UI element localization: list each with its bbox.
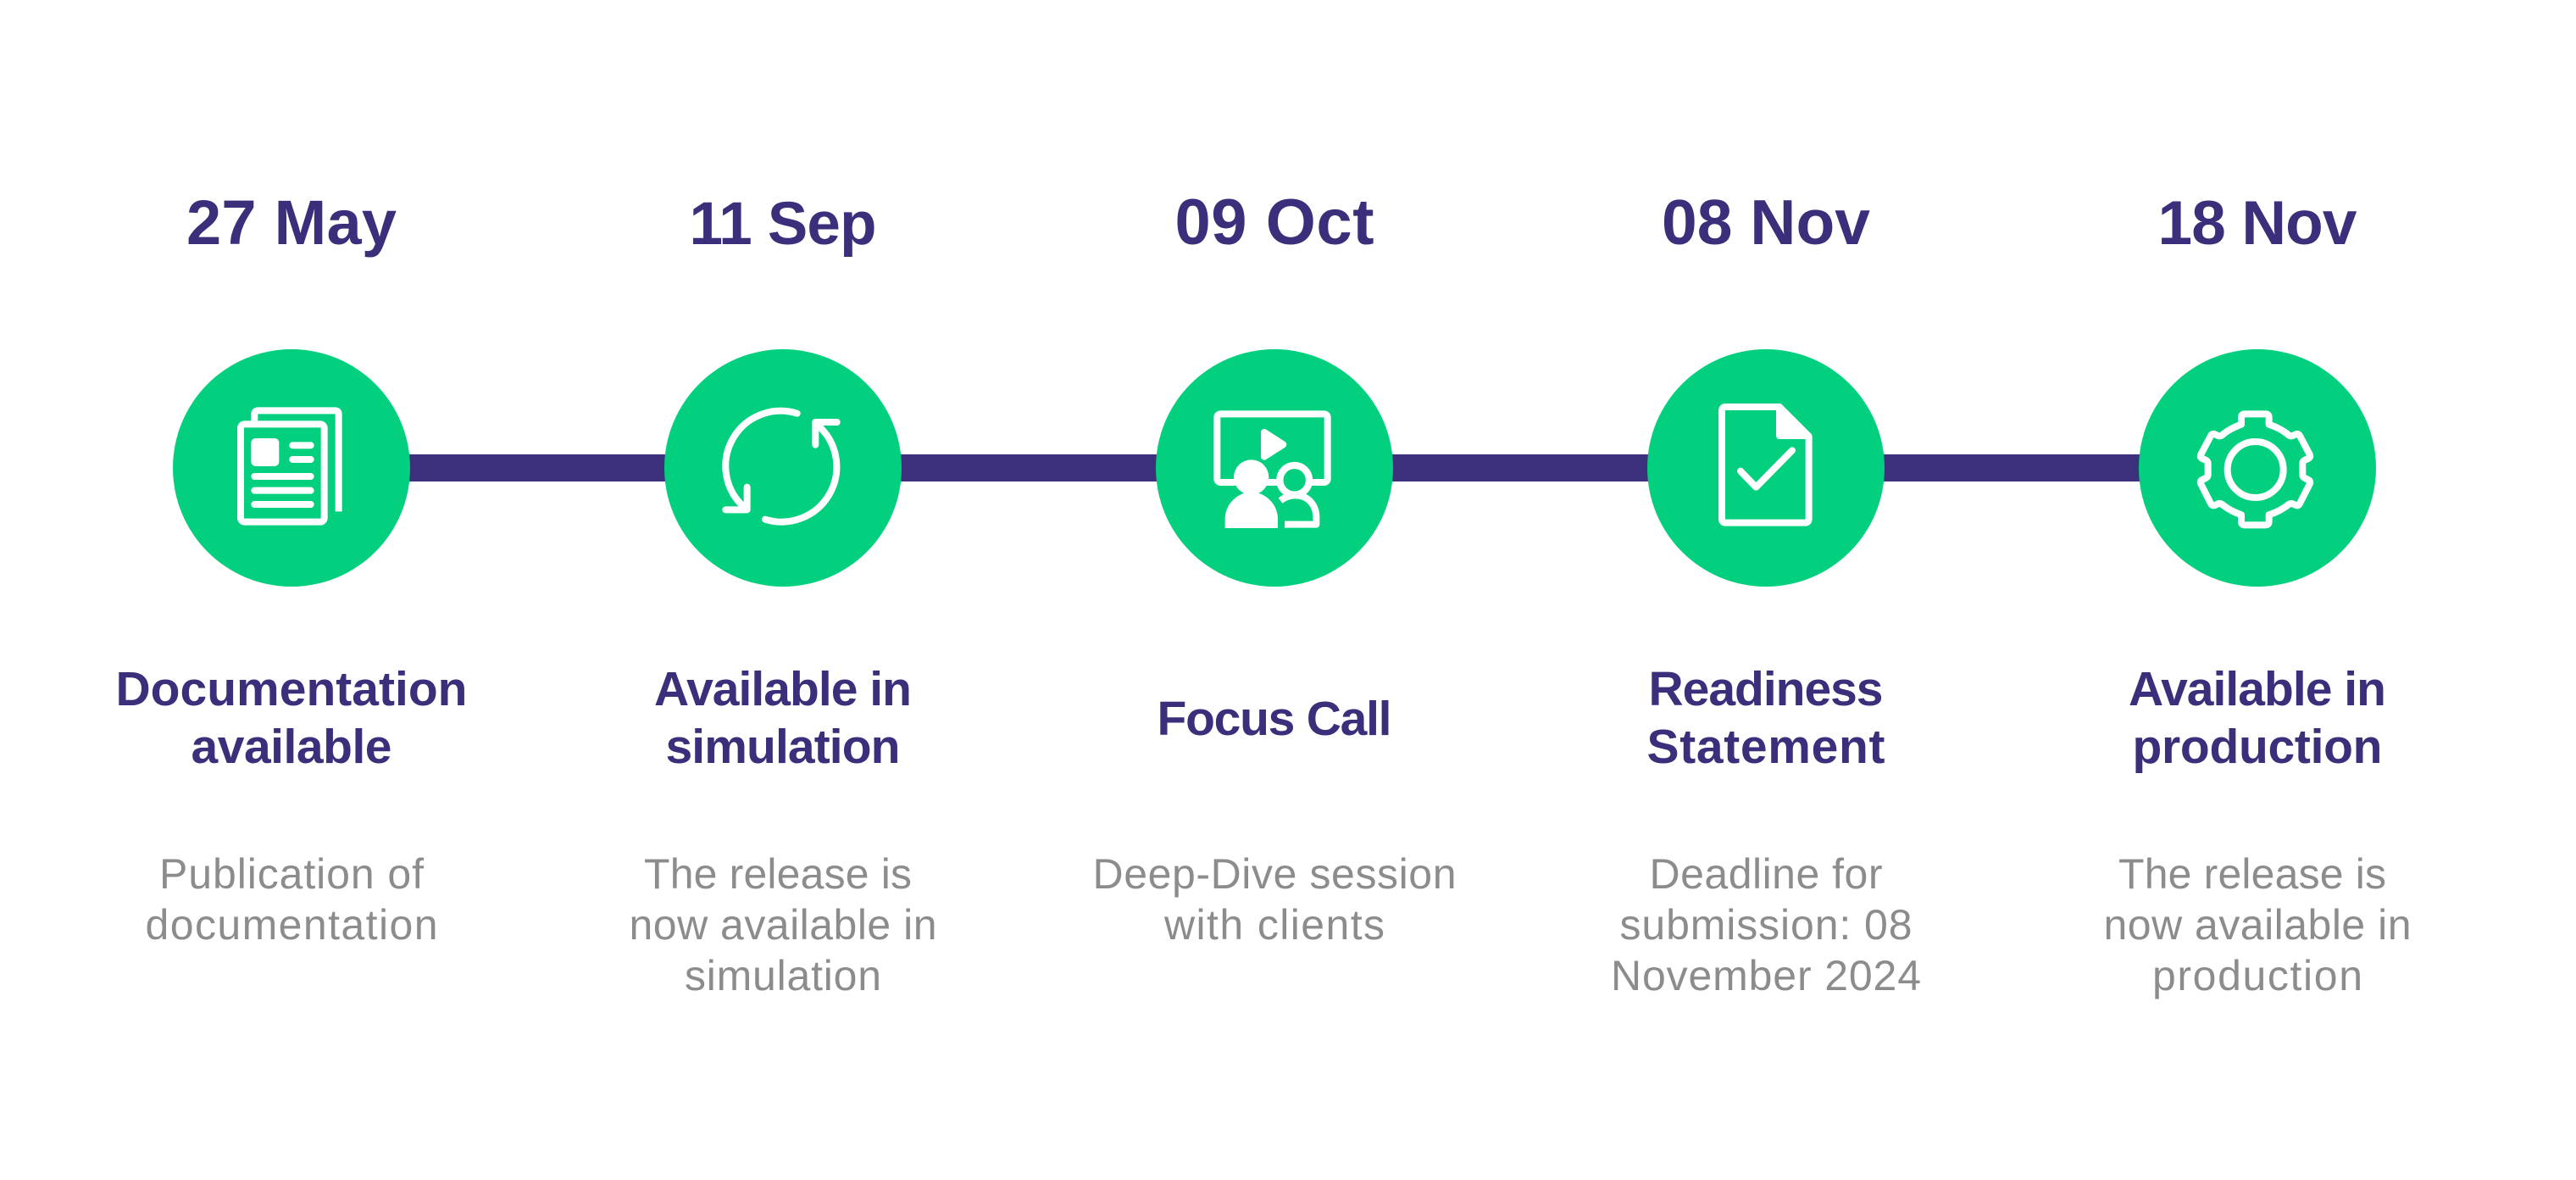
- title: Available in production: Available in: [2129, 662, 2386, 716]
- timeline bar: [291, 454, 2257, 481]
- description: The release is now available in production: The release is: [2118, 850, 2386, 898]
- description: The release is now available in simulation: The release is: [644, 850, 912, 898]
- milestone 5: 18 Nov: [2103, 189, 2412, 999]
- title: Available in simulation: simulation: [666, 720, 900, 774]
- title: Documentation available: [115, 662, 468, 774]
- title: Documentation available: Documentation: [115, 662, 468, 716]
- description: Deadline for submission: 08 November 2024: [1611, 850, 1921, 999]
- date: 09 Oct: 09 Oct: [1174, 186, 1374, 259]
- milestone 4: 08 Nov: [1611, 186, 1921, 999]
- date: 18 Nov: 18 Nov: [2157, 189, 2357, 258]
- description: The release is now available in production: [2103, 850, 2412, 999]
- title: Readiness Statement: [1647, 662, 1885, 774]
- description: Publication of documentation: Publication of: [159, 850, 424, 898]
- description: The release is now available in simulation: simulation: [685, 952, 881, 999]
- description: Publication of documentation: documentation: [146, 901, 437, 949]
- description: The release is now available in simulation: [629, 850, 937, 999]
- icon: documents in green circle: [173, 349, 410, 587]
- description: The release is now available in production: production: [2152, 952, 2362, 999]
- title: Readiness Statement: Statement: [1647, 720, 1885, 774]
- title: Focus Call: Focus Call: [1158, 692, 1391, 746]
- date: 08 Nov: 08 Nov: [1662, 186, 1870, 258]
- date: 27 May: 27 May: [186, 187, 397, 258]
- description: Deadline for submission: 08 November 2024: November 2024: [1611, 952, 1921, 999]
- description: The release is now available in simulation: now available in: [629, 901, 937, 949]
- icon: gear in green circle: [2139, 349, 2376, 587]
- date: 11 Sep: 11 Sep: [690, 191, 876, 258]
- description: The release is now available in production: now available in: [2103, 901, 2412, 949]
- milestone 2: 11 Sep: [629, 191, 937, 999]
- milestone 1: 27 May: [115, 187, 468, 949]
- title: Available in simulation: [654, 662, 912, 774]
- title: Readiness Statement: Readiness: [1649, 662, 1883, 716]
- description: Deep-Dive session with clients: Deep-Dive session: [1093, 850, 1456, 898]
- description: Deep-Dive session with clients: [1093, 850, 1456, 949]
- title: Available in simulation: Available in: [654, 662, 912, 716]
- description: Deadline for submission: 08 November 2024: Deadline for: [1649, 850, 1883, 898]
- description: Deep-Dive session with clients: with clients: [1163, 901, 1385, 949]
- title: Documentation available: available: [192, 720, 391, 774]
- title: Available in production: production: [2132, 720, 2383, 774]
- description: Deadline for submission: 08 November 2024: submission: 08: [1620, 901, 1912, 949]
- icon: refresh arrows in green circle: [664, 349, 902, 587]
- icon: video presentation with people in green circle: [1156, 349, 1393, 587]
- milestone 3: 09 Oct: [1093, 186, 1456, 949]
- icon: document with check mark in green circle: [1647, 349, 1885, 587]
- title: Available in production: [2129, 662, 2386, 774]
- description: Publication of documentation: [146, 850, 437, 949]
